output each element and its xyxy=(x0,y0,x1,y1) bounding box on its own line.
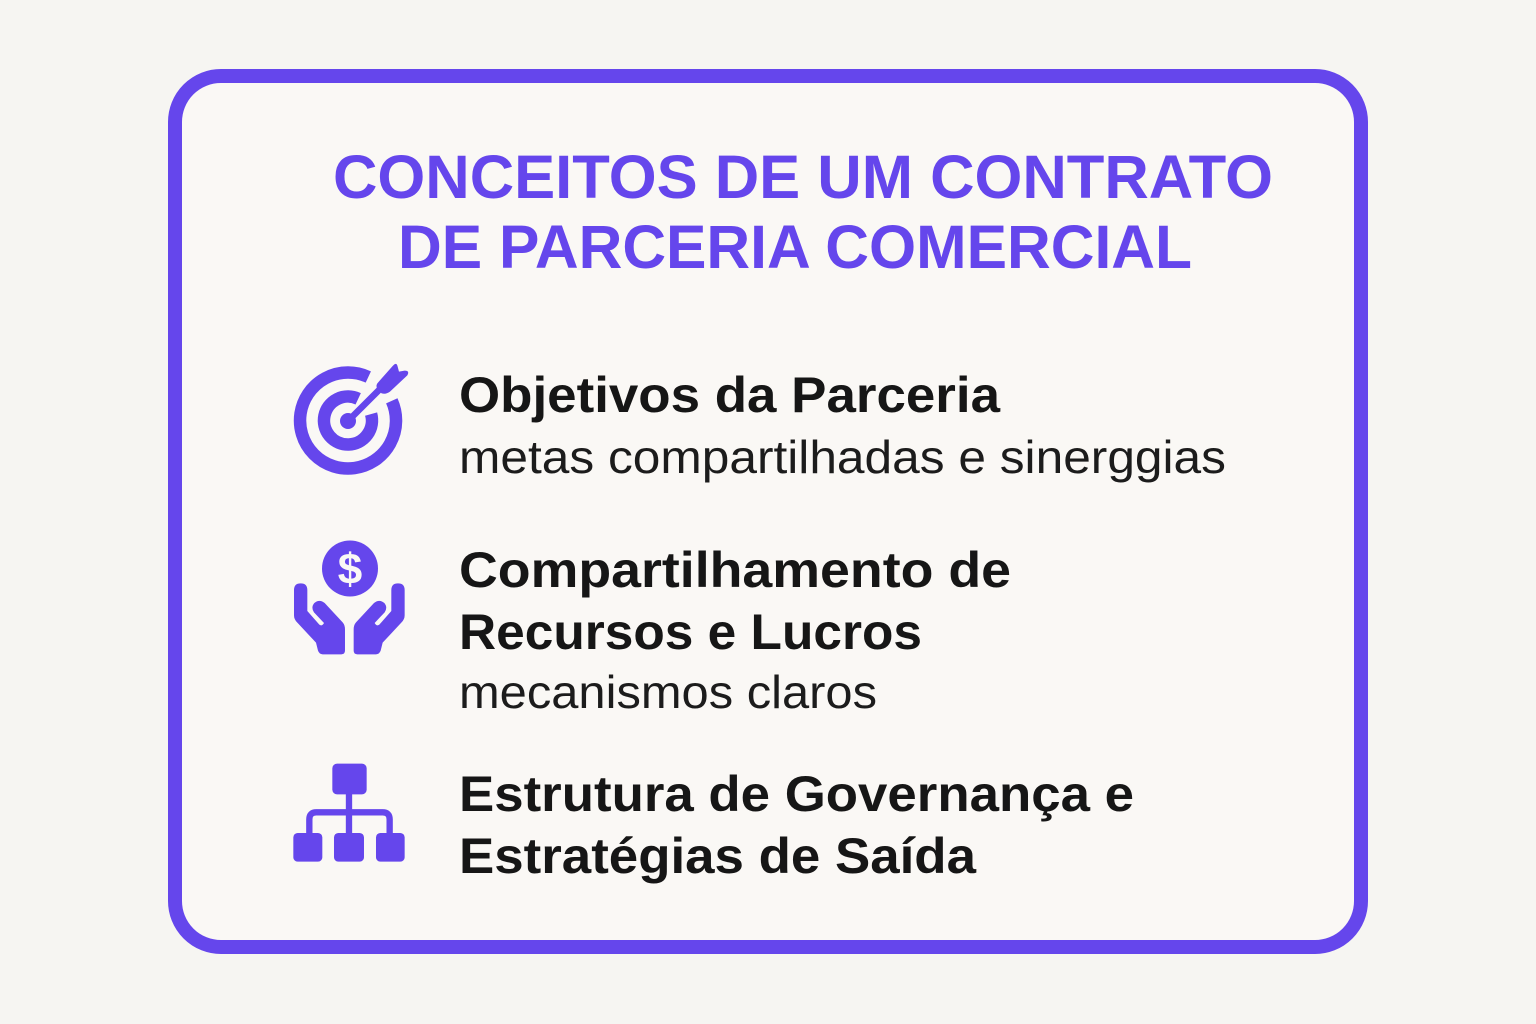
title xyxy=(333,143,1273,281)
text block: estrutura xyxy=(459,766,1134,884)
text block: compartilhamento: Compartilhamento de xyxy=(459,542,1011,598)
icon: target with arrow xyxy=(300,364,408,469)
icon: hands holding coin xyxy=(294,540,405,654)
text block: compartilhamento xyxy=(459,542,1011,718)
text block: compartilhamento: Recursos e Lucros xyxy=(459,604,922,660)
text block: estrutura: Estratégias de Saída xyxy=(459,828,977,884)
panel: card with purple border xyxy=(175,76,1361,947)
dollar sign: $ xyxy=(338,545,362,594)
text block: objetivos: Objetivos da Parceria xyxy=(459,367,1001,423)
title: DE PARCERIA COMERCIAL xyxy=(398,213,1192,281)
title: CONCEITOS DE UM CONTRATO xyxy=(333,143,1273,211)
text block: objetivos: metas compartilhadas e sinerggias xyxy=(459,431,1226,483)
coin xyxy=(322,540,378,596)
text block: compartilhamento: mecanismos claros xyxy=(459,666,877,718)
left hand xyxy=(294,583,345,654)
text block: estrutura: Estrutura de Governança e xyxy=(459,766,1134,822)
right hand xyxy=(354,583,405,654)
text block: objetivos xyxy=(459,367,1226,483)
icon: organization chart xyxy=(293,764,405,862)
